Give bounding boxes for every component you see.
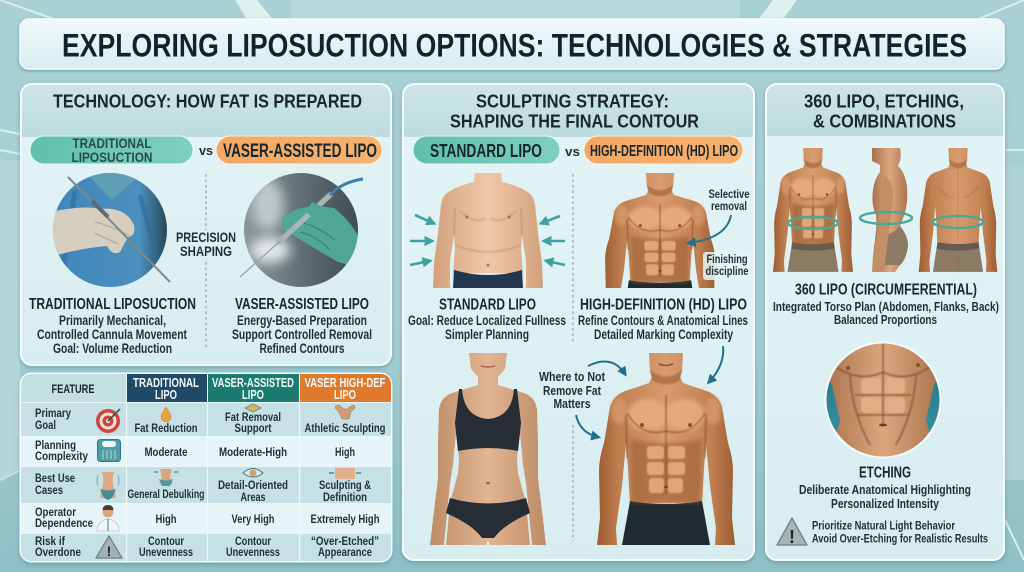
text block: hd lipo: Detailed Marking Complexity	[594, 327, 733, 342]
photo: vaser handpiece with mist	[240, 172, 363, 288]
icon: warning triangle: !	[107, 543, 111, 559]
heading: 360 lipo: 360 LIPO, ETCHING,	[804, 90, 964, 112]
pill: high-definition lipo	[584, 136, 743, 164]
label: precision shaping: SHAPING	[180, 243, 232, 259]
row: operator dependence: High	[156, 512, 176, 526]
table header row: LIPO	[242, 388, 264, 402]
row: risk if overdone: Contour	[148, 534, 184, 548]
pill: high-definition lipo: HIGH-DEFINITION (HD) LIPO	[590, 143, 738, 160]
row: risk if overdone: Unevenness	[226, 545, 280, 559]
icon: doctor	[97, 505, 119, 531]
row: planning complexity: Moderate-High	[219, 445, 287, 459]
callout: where to not remove fat	[539, 370, 606, 411]
row: primary goal: Athletic Sculpting	[304, 421, 386, 435]
vs label: vs	[199, 143, 213, 158]
icon: eye	[243, 468, 263, 477]
figure: woman	[430, 353, 546, 545]
heading: sculpting strategy: SCULPTING STRATEGY:	[476, 90, 669, 112]
text block: etching: ETCHING	[859, 464, 911, 482]
arrows: where to not remove fat	[576, 346, 723, 437]
text block: traditional liposuction	[29, 296, 196, 356]
text block: hd lipo	[578, 296, 748, 342]
callout: finishing discipline: Finishing	[706, 254, 748, 266]
row: planning complexity	[35, 438, 355, 463]
table header row: LIPO	[334, 388, 356, 402]
callout: selective removal: Selective	[708, 189, 750, 201]
pill: standard lipo: STANDARD LIPO	[430, 140, 542, 161]
icon: warning triangle	[96, 536, 122, 559]
heading: sculpting strategy	[450, 90, 699, 132]
icon: warning triangle: !	[789, 527, 795, 547]
callout: where to not remove fat: Where to Not	[539, 370, 606, 384]
row: risk if overdone: “Over-Etched”	[311, 534, 379, 548]
figure: 360 front view	[773, 148, 853, 272]
pill: traditional liposuction: LIPOSUCTION	[72, 150, 152, 165]
photo: etched abdomen	[824, 341, 942, 459]
icon: fat drop	[161, 407, 171, 422]
icon: debulking torso	[154, 469, 178, 486]
pill: vaser-assisted lipo	[216, 136, 382, 164]
row: primary goal	[35, 404, 386, 435]
text block: standard lipo: Simpler Planning	[445, 327, 529, 342]
figure: 360 back view	[919, 148, 997, 272]
row: best use cases: Areas	[240, 490, 266, 504]
label: precision shaping: PRECISION	[176, 229, 236, 245]
row: planning complexity: Complexity	[35, 449, 88, 463]
icon: flexing torso	[335, 405, 355, 419]
row: best use cases: Sculpting &	[319, 478, 371, 492]
row: best use cases: Best Use	[35, 471, 75, 485]
callout: etching caution: Prioritize Natural Light Behavior	[812, 518, 955, 532]
text block: 360 lipo: Balanced Proportions	[834, 312, 937, 327]
icon: target	[96, 409, 120, 433]
pill: vaser-assisted lipo: VASER-ASSISTED LIPO	[223, 141, 377, 162]
vs label: vs	[565, 144, 580, 159]
text block: standard lipo: Goal: Reduce Localized Fullness	[408, 313, 566, 328]
title banner	[20, 19, 1004, 69]
panel: comparison table	[20, 373, 392, 562]
text block: vaser-assisted lipo	[232, 296, 372, 356]
callout: where to not remove fat: Matters	[554, 397, 591, 411]
text block: vaser-assisted lipo: VASER-ASSISTED LIPO	[235, 296, 369, 313]
text block: hd lipo: HIGH-DEFINITION (HD) LIPO	[580, 296, 747, 314]
callout: selective removal: removal	[711, 201, 747, 213]
callout: finishing discipline: discipline	[706, 266, 748, 278]
table header row: LIPO	[155, 388, 177, 402]
text block: hd lipo: Refine Contours & Anatomical Lines	[578, 313, 748, 328]
text block: etching	[799, 464, 971, 511]
row: best use cases: Cases	[35, 483, 63, 497]
heading: 360 lipo: & COMBINATIONS	[813, 110, 956, 132]
callout: finishing discipline	[703, 252, 750, 280]
text block: standard lipo: STANDARD LIPO	[439, 296, 536, 314]
row: operator dependence: Operator	[35, 505, 76, 519]
table header row: FEATURE	[52, 382, 94, 396]
photo: traditional cannula in gloved hand	[50, 170, 170, 290]
row: risk if overdone	[35, 534, 379, 559]
row: risk if overdone: Unevenness	[139, 545, 193, 559]
text block: etching: Personalized Intensity	[831, 496, 940, 511]
text block: traditional liposuction: Goal: Volume Reduction	[53, 341, 172, 356]
callout: selective removal	[708, 189, 750, 213]
row: best use cases	[35, 468, 371, 504]
text block: etching: Deliberate Anatomical Highlighting	[799, 482, 971, 497]
row: best use cases: General Debulking	[128, 487, 204, 501]
panel: sculpting strategy	[403, 84, 754, 560]
table header row	[52, 376, 386, 402]
figure: 360 side view	[860, 148, 912, 272]
row: operator dependence	[35, 505, 380, 531]
icon: weighing scale	[98, 440, 120, 462]
row: operator dependence: Dependence	[35, 516, 93, 530]
figure: sculpted man	[597, 353, 735, 545]
arrow: selective removal	[689, 215, 731, 243]
label: precision shaping	[176, 229, 236, 259]
arrows: standard lipo inward	[410, 215, 565, 265]
text block: traditional liposuction: Primarily Mechanical,	[59, 313, 166, 328]
row: risk if overdone: Contour	[235, 534, 271, 548]
row: primary goal: Support	[234, 421, 272, 435]
text block: vaser-assisted lipo: Refined Contours	[260, 341, 344, 356]
pill: standard lipo	[413, 136, 560, 164]
table header row: VASER HIGH-DEF	[304, 376, 386, 390]
callout: where to not remove fat: Remove Fat	[543, 384, 602, 398]
row: primary goal: Primary	[35, 406, 71, 420]
heading: technology: TECHNOLOGY: HOW FAT IS PREPARED	[53, 92, 362, 112]
panel: technology	[21, 84, 391, 365]
text block: 360 lipo	[773, 282, 999, 327]
text block: vaser-assisted lipo: Energy-Based Preparation	[237, 313, 367, 328]
figure: standard torso	[433, 173, 543, 288]
text block: standard lipo	[408, 296, 566, 342]
pill: traditional liposuction	[30, 136, 193, 165]
table header row: VASER-ASSISTED	[212, 376, 294, 390]
figure: hd torso	[605, 173, 715, 288]
row: best use cases: Detail-Oriented	[218, 478, 288, 492]
row: operator dependence: Extremely High	[310, 512, 380, 526]
row: operator dependence: Very High	[232, 512, 274, 526]
heading: 360 lipo	[804, 90, 964, 132]
row: best use cases: Definition	[323, 490, 367, 504]
table header row: TRADITIONAL	[133, 376, 199, 390]
heading: sculpting strategy: SHAPING THE FINAL CONTOUR	[450, 110, 699, 132]
icon: waist definition	[329, 468, 361, 479]
row: risk if overdone: Overdone	[35, 545, 81, 559]
text block: 360 lipo: 360 LIPO (CIRCUMFERENTIAL)	[795, 282, 977, 298]
row: primary goal: Fat Reduction	[134, 421, 198, 435]
row: planning complexity: High	[335, 445, 355, 459]
icon: waist	[97, 472, 119, 500]
pill: traditional liposuction: TRADITIONAL	[72, 136, 152, 151]
row: planning complexity: Planning	[35, 438, 76, 452]
text block: traditional liposuction: TRADITIONAL LIPOSUCTION	[29, 296, 196, 313]
row: primary goal: Fat Removal	[225, 410, 281, 424]
row: risk if overdone: Appearance	[318, 545, 372, 559]
callout: etching caution	[812, 518, 988, 546]
text block: vaser-assisted lipo: Support Controlled Removal	[232, 327, 372, 342]
text block: traditional liposuction: Controlled Cannula Movement	[37, 327, 187, 342]
icon: warning triangle	[777, 518, 807, 547]
row: planning complexity: Moderate	[144, 445, 188, 459]
panel: 360 lipo, etching and combinations	[766, 84, 1004, 560]
icon: fat removal	[245, 404, 261, 412]
row: primary goal: Goal	[35, 418, 56, 432]
row: risk if overdone: Risk if	[35, 534, 66, 548]
